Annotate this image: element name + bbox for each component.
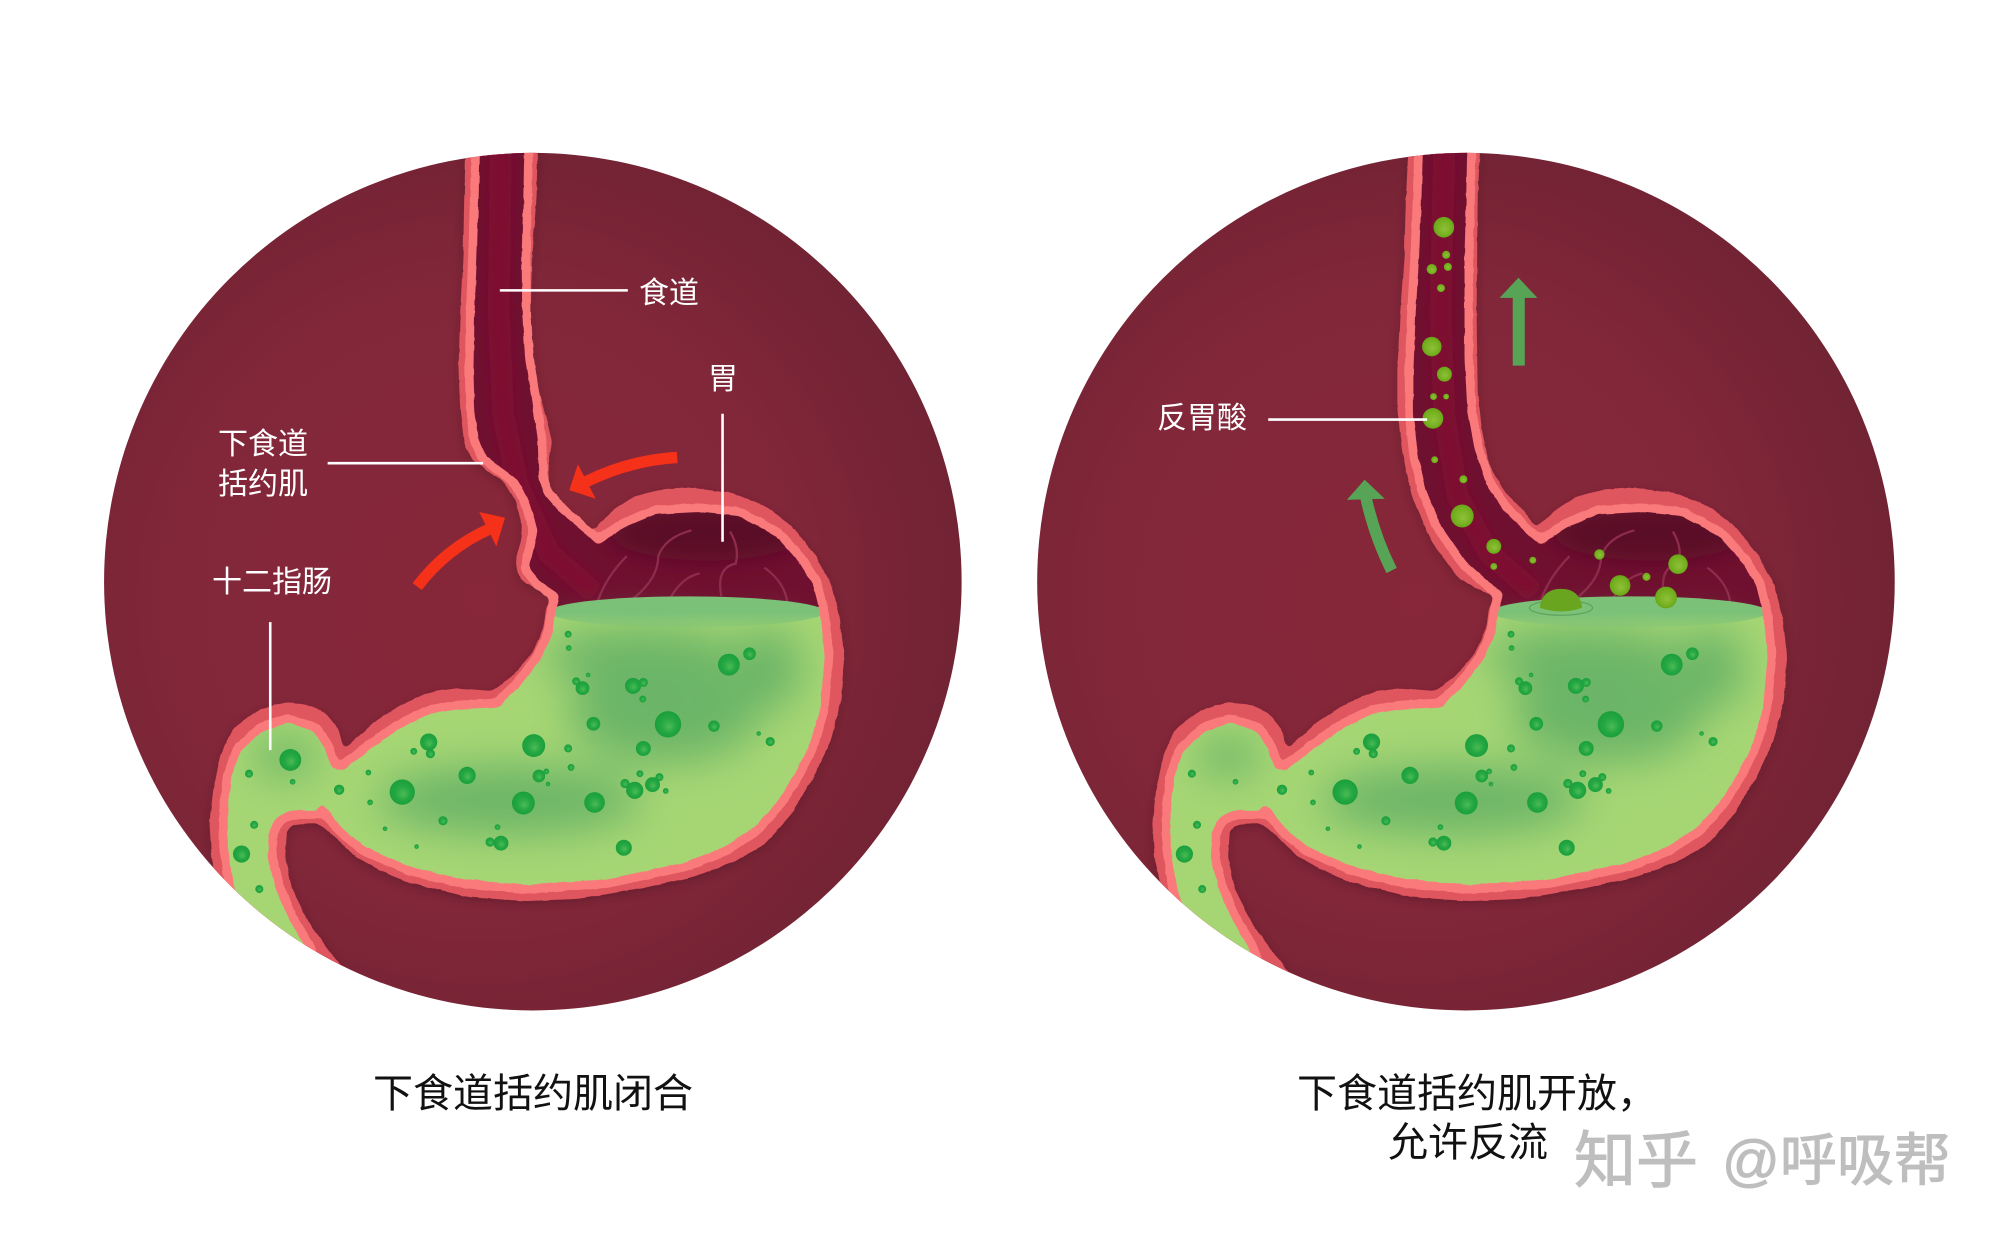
caption: sphincter closed: 下食道括约肌闭合 <box>373 1072 693 1116</box>
caption: sphincter open: 下食道括约肌开放， <box>1297 1072 1657 1116</box>
label: lower esophageal sphincter <box>218 428 308 501</box>
caption: sphincter open <box>1297 1072 1657 1165</box>
stomach acid bubbles <box>1176 631 1718 893</box>
panel: sphincter closed <box>104 140 962 1010</box>
acid surface <box>1492 596 1768 627</box>
caption: sphincter open: 允许反流 <box>1388 1121 1548 1165</box>
arrow: upper sphincter squeeze <box>417 512 505 587</box>
arrow: lower sphincter squeeze <box>569 457 677 499</box>
arrow: reflux up the esophagus <box>1500 278 1537 366</box>
acid surface <box>549 596 825 627</box>
label: lower esophageal sphincter: 下食道 <box>218 428 308 461</box>
infographic: closed and open lower esophageal sphincter <box>104 152 1948 1188</box>
stomach and esophagus cross-section <box>208 152 845 966</box>
watermark <box>1574 1127 1951 1196</box>
label: lower esophageal sphincter: 括约肌 <box>218 468 308 501</box>
leader line <box>1268 417 1427 422</box>
background circle <box>104 153 962 1010</box>
stomach and esophagus cross-section <box>1151 152 1788 972</box>
arrow: reflux through sphincter <box>1347 480 1392 570</box>
acid bubbles <box>233 631 775 893</box>
background circle <box>1037 153 1895 1010</box>
label: duodenum: 十二指肠 <box>212 566 332 599</box>
bubble bursting at the surface <box>1529 589 1593 615</box>
watermark: 知乎 <box>1574 1127 1698 1196</box>
label: refluxed acid: 反胃酸 <box>1157 402 1247 435</box>
reflux droplets <box>1422 217 1688 608</box>
label: stomach: 胃 <box>708 363 738 396</box>
watermark: @呼吸帮 <box>1722 1129 1951 1193</box>
label: esophagus: 食道 <box>639 277 699 310</box>
leader lines <box>270 290 723 750</box>
panel: sphincter open with reflux <box>1037 140 1895 1010</box>
